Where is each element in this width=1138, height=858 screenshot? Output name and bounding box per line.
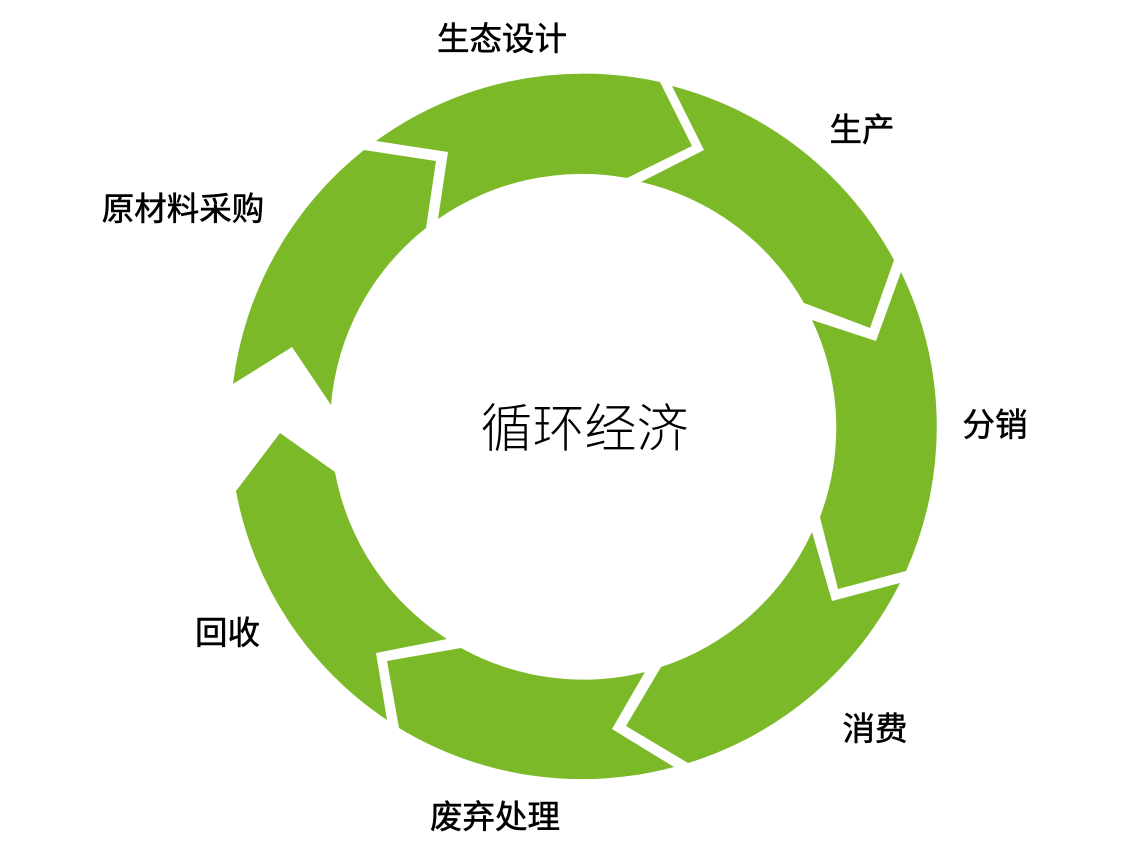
label: disposal: 废弃处理 [430, 799, 560, 835]
label: production: 生产 [829, 112, 895, 148]
arrow segment: production [641, 86, 894, 328]
arrow segment: consumption [626, 532, 900, 763]
label: recycling: 回收 [195, 615, 260, 651]
center title: 循环经济 [480, 401, 689, 459]
label: distribution: 分销 [962, 407, 1028, 443]
arrow segment: distribution [812, 272, 937, 589]
label: eco design: 生态设计 [437, 21, 567, 57]
arrow segment: eco design [376, 74, 692, 219]
label: consumption: 消费 [842, 711, 908, 747]
arrow segment: recycling [236, 433, 447, 720]
arrow segment: disposal [387, 648, 674, 779]
arrow segment: raw material sourcing [233, 150, 436, 405]
label: raw material sourcing: 原材料采购 [102, 191, 264, 227]
